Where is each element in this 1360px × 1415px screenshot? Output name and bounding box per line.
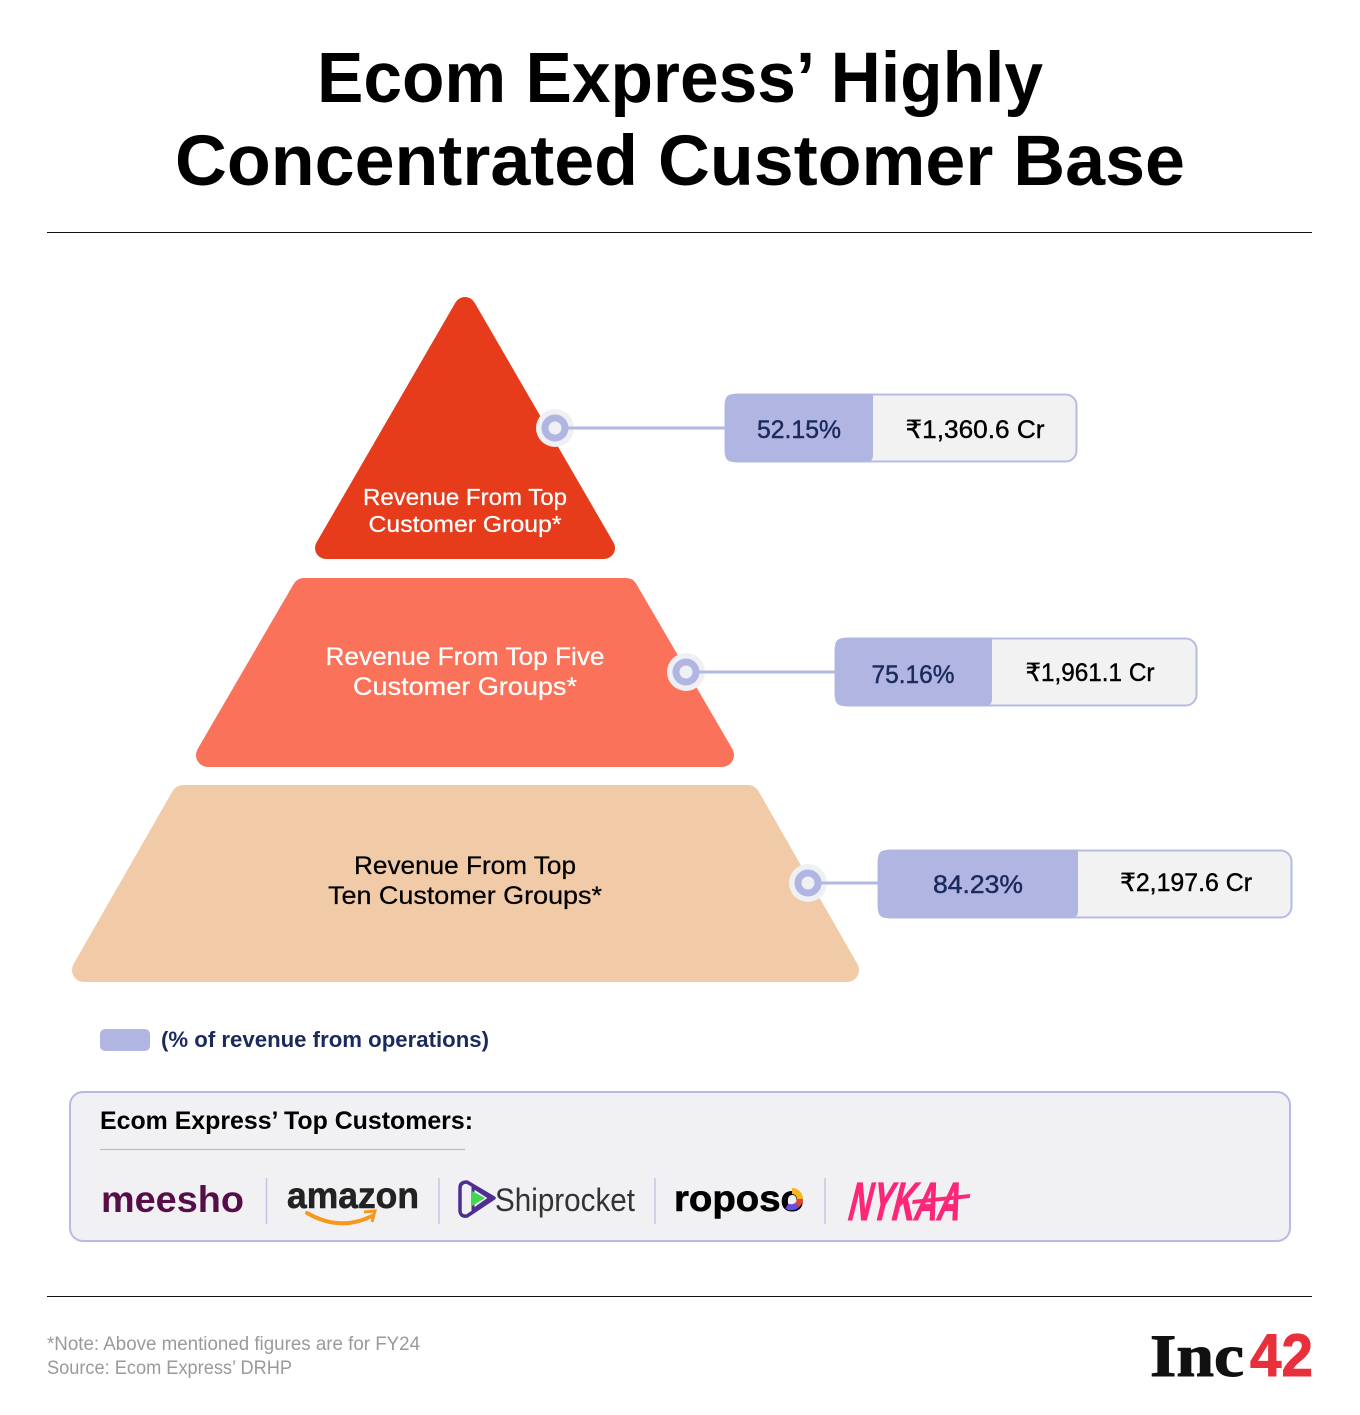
title xyxy=(175,39,1185,201)
pyramid tier: top ten customer groups: Revenue From Top xyxy=(354,852,576,880)
pyramid tier: top customer group: Revenue From Top xyxy=(363,484,567,510)
callout: top ten customer groups: 84.23% xyxy=(933,871,1023,899)
logo: roposo: roposo xyxy=(674,1178,804,1219)
logo: amazon: amazon xyxy=(287,1175,419,1216)
logo: nykaa xyxy=(843,1171,976,1232)
legend: (% of revenue from operations) xyxy=(161,1027,489,1052)
pyramid tier: top customer group xyxy=(326,308,604,548)
pyramid tier: top five customer groups: Customer Groups* xyxy=(353,673,577,701)
pyramid tier: top ten customer groups xyxy=(84,797,847,970)
footnote xyxy=(47,1333,420,1379)
pyramid tier: top customer group: Customer Group* xyxy=(368,511,562,537)
callout: top customer group: ₹1,360.6 Cr xyxy=(906,416,1044,444)
logo: shiprocket: Shiprocket xyxy=(495,1182,635,1218)
logo: meesho: meesho xyxy=(101,1179,244,1220)
callout: top customer group xyxy=(536,394,1076,462)
pyramid tier: top five customer groups xyxy=(208,590,722,755)
logo: Inc42: Inc xyxy=(1150,1323,1244,1389)
panel heading: Ecom Express’ Top Customers: xyxy=(100,1107,473,1135)
callout: top five customer groups: 75.16% xyxy=(872,661,954,689)
footnote: Source: Ecom Express’ DRHP xyxy=(47,1357,292,1379)
pyramid tier: top ten customer groups: Ten Customer Groups* xyxy=(328,882,602,910)
logo: Inc42 xyxy=(1150,1322,1313,1389)
title: Ecom Express’ Highly xyxy=(317,39,1043,118)
panel: pyramid xyxy=(84,308,847,970)
title: Concentrated Customer Base xyxy=(175,122,1185,201)
footnote: *Note: Above mentioned figures are for FY24 xyxy=(47,1333,420,1355)
callout: top ten customer groups: ₹2,197.6 Cr xyxy=(1120,869,1252,897)
callout: top ten customer groups xyxy=(789,850,1292,918)
callout: top five customer groups xyxy=(667,638,1196,706)
pyramid tier: top five customer groups: Revenue From Top Five xyxy=(326,643,604,671)
panel: top customers xyxy=(70,1092,1290,1241)
logo: Inc42: 42 xyxy=(1250,1322,1313,1389)
logo: nykaa: NYKAA xyxy=(843,1171,970,1232)
callout: top five customer groups: ₹1,961.1 Cr xyxy=(1026,659,1154,687)
callout: top customer group: 52.15% xyxy=(757,416,841,444)
